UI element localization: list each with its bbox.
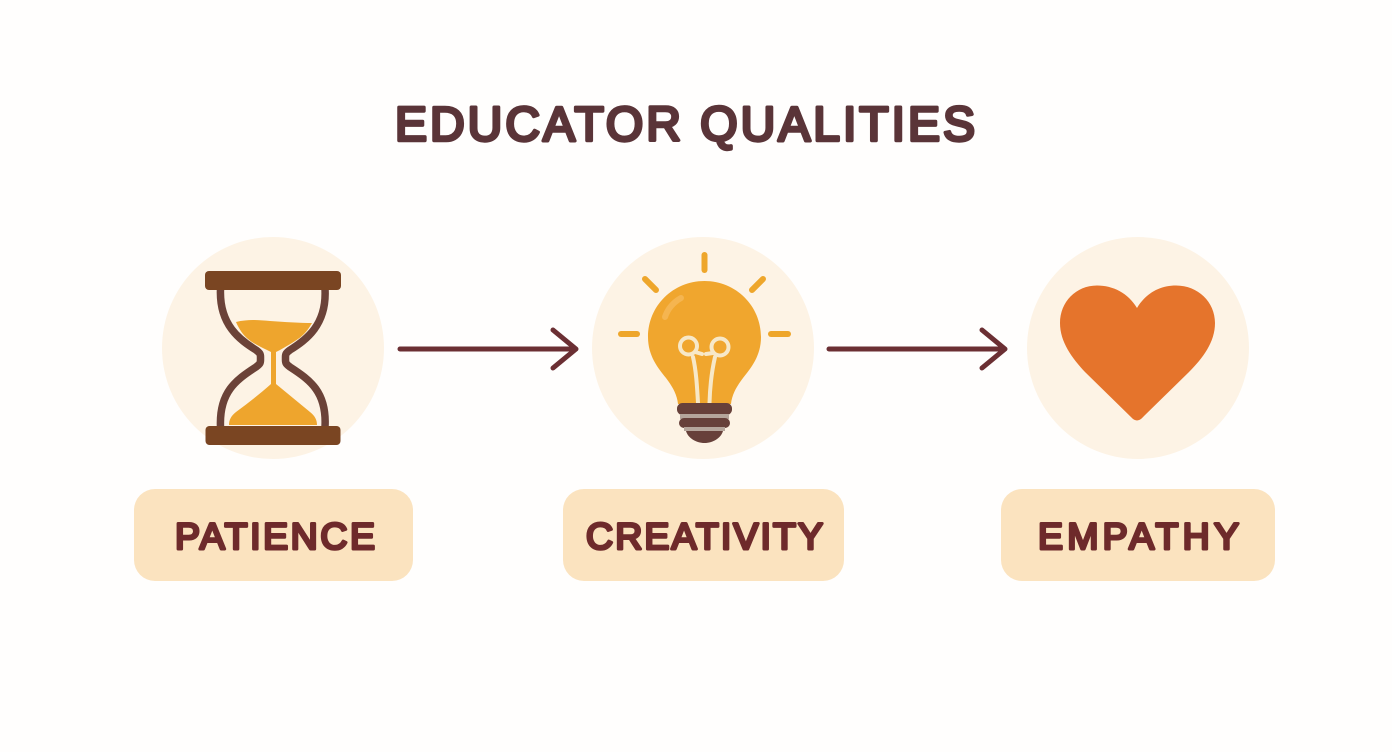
icon background: creativity circle <box>592 237 814 459</box>
panel: empathy <box>1001 237 1275 581</box>
arrow: creativity to empathy <box>829 330 1005 368</box>
panel: creativity <box>563 237 844 581</box>
icon: light bulb <box>621 255 788 443</box>
label pill: empathy <box>1001 489 1275 581</box>
arrow: patience to creativity <box>400 330 576 368</box>
icon background: empathy circle <box>1027 237 1249 459</box>
label pill: patience <box>134 489 413 581</box>
icon background: patience circle <box>162 237 384 459</box>
panel: patience <box>134 237 413 581</box>
title: EDUCATOR QUALITIES <box>395 98 975 152</box>
label pill: creativity <box>563 489 844 581</box>
label pill: creativity: CREATIVITY <box>586 515 823 557</box>
label pill: patience: PATIENCE <box>175 515 375 557</box>
icon: heart <box>1060 286 1215 420</box>
icon: hourglass <box>205 271 341 445</box>
label pill: empathy: EMPATHY <box>1038 515 1239 557</box>
